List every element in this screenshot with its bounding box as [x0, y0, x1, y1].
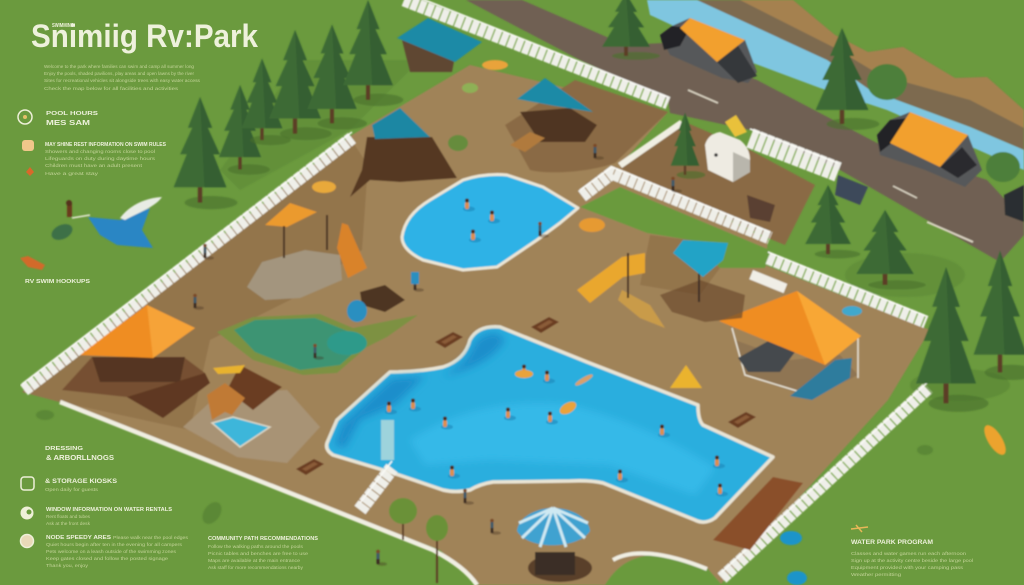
small orange canopy: [265, 181, 336, 258]
lawn board: [20, 256, 45, 270]
item: amenities heading: DRESSING: [45, 446, 83, 452]
lawn tufts: [36, 410, 933, 527]
item: information: Rent floats and tubes: [46, 514, 91, 519]
item: information: WINDOW INFORMATION ON WATER RENTALS: [46, 507, 172, 513]
intro text block: Check the map below for all facilities and activities: [44, 86, 179, 91]
item: community: Follow the walking paths around the pools: [208, 544, 304, 549]
item: notes: Thank you, enjoy: [46, 563, 89, 568]
title: Snimiig Rv:Park: [31, 18, 258, 54]
teal canopy top: [397, 18, 508, 93]
intro text block: Sites for recreational vehicles sit alongside trees with easy water access: [44, 78, 201, 83]
item: notes: Please walk near the pool edges: [113, 535, 189, 540]
orange pavilion left: [62, 305, 210, 418]
parked trucks: [660, 18, 1024, 222]
teal canopy centre: [510, 78, 597, 152]
lawn shading: [220, 60, 1010, 401]
item: park rules: Have a great stay: [45, 171, 99, 176]
item: pool hours: POOL HOURS: [46, 111, 98, 117]
item: park rules: Lifeguards on duty during daytime hours: [45, 156, 156, 161]
teal umbrella: [660, 240, 745, 322]
item: community: Picnic tables and benches are free to use: [208, 551, 309, 556]
item: notes: Quiet hours begin after ten in the evening for all campers: [46, 542, 183, 547]
area: road: [466, 0, 1024, 262]
area: river and bank: [647, 0, 1024, 170]
bottom lawn bay: [605, 553, 722, 585]
item: snack kiosk: Open daily for guests: [45, 487, 99, 492]
item: notes: [20, 534, 189, 568]
striped umbrella: [517, 508, 592, 582]
item: water program: [851, 525, 973, 577]
item: notes: Pets welcome on a leash outside of the swimming zones: [46, 549, 177, 554]
small pool with stone deck: [183, 365, 320, 463]
item: notes: NODE SPEEDY ARES: [46, 535, 111, 541]
item: park rules: [22, 140, 166, 176]
climbing frame: [337, 223, 367, 278]
item: amenities heading: [45, 446, 114, 462]
item: park rules: MAY SHINE REST INFORMATION ON SWIM RULES: [45, 142, 166, 148]
title: SWIMMING: [52, 23, 74, 29]
item: information: Ask at the front desk: [46, 521, 91, 526]
item: snack kiosk: & STORAGE KIOSKS: [45, 479, 117, 485]
item: water program: Classes and water games run each afternoon: [851, 551, 967, 556]
teal canopy at playground: [350, 108, 468, 197]
area: park ground: [22, 65, 930, 585]
intro text block: [44, 64, 201, 91]
main pool: [327, 327, 773, 522]
item: water program: WATER PARK PROGRAM: [851, 540, 933, 546]
item: community: COMMUNITY PATH RECOMMENDATIONS: [208, 536, 318, 542]
item: park rules: Children must have an adult present: [45, 163, 143, 168]
white boundary curb: [60, 402, 477, 585]
stone plaza: [247, 250, 342, 300]
white strip by the lot: [618, 120, 684, 168]
upper round pool: [402, 175, 578, 270]
intro text block: Enjoy the pools, shaded pavilions, play areas and open lawns by the river: [44, 71, 195, 76]
item: snack kiosk: [21, 477, 117, 492]
item: community: Maps are available at the main entrance: [208, 558, 301, 563]
item: lawn heading: RV SWIM HOOKUPS: [25, 279, 90, 285]
item: community: Ask staff for more recommendations nearby: [208, 565, 304, 570]
caravan: [705, 115, 750, 182]
item: water program: Weather permitting: [851, 572, 902, 577]
item: pool hours: MES SAM: [46, 118, 90, 127]
people and benches: [193, 144, 868, 566]
item: community: [208, 536, 318, 570]
item: park rules: Showers and changing rooms close to pool: [45, 149, 155, 154]
playground slide: [577, 253, 665, 328]
item: water program: Equipment provided with your camping pass: [851, 565, 964, 570]
item: pool hours: [18, 110, 98, 127]
item: water program: Sign up at the activity centre beside the large pool: [851, 558, 973, 563]
lawn water slide with figure: [49, 197, 162, 248]
lawn items: umbrellas and board: [780, 306, 1010, 585]
item: information: [20, 506, 172, 526]
item: notes: Keep gates closed and follow the posted signage: [46, 556, 169, 561]
green pond: [217, 314, 418, 375]
item: amenities heading: & ARBORLLNOGS: [46, 455, 114, 462]
intro text block: Welcome to the park where families can swim and camp all summer long: [44, 64, 195, 69]
orange pavilion right: [719, 291, 861, 400]
